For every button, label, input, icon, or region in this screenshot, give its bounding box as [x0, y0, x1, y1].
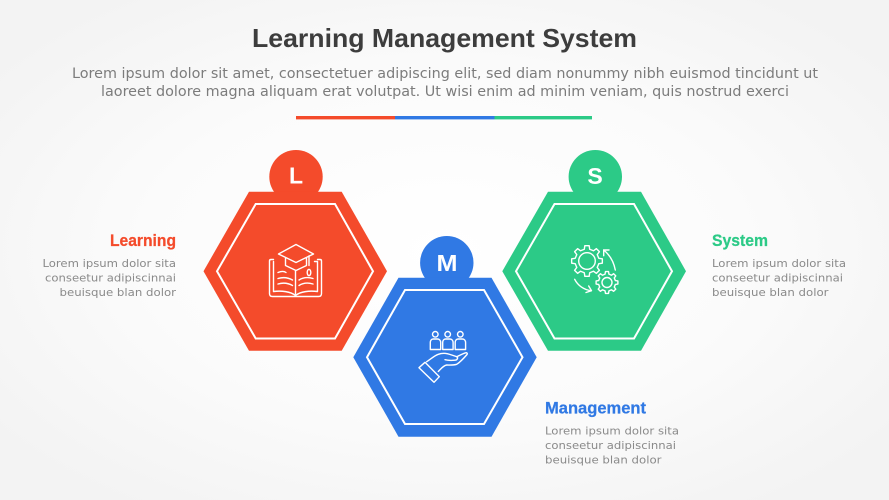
- description: management: conseetur adipiscinnai: [545, 439, 676, 452]
- description: learning: conseetur adipiscinnai: [45, 272, 176, 284]
- description: system: Lorem ipsum dolor sita: [712, 257, 846, 270]
- text block: learning: [42, 232, 177, 299]
- description: learning: beuisque blan dolor: [60, 286, 177, 299]
- panel: system hexagon: [502, 150, 686, 351]
- heading: learning: Learning: [110, 232, 176, 250]
- letter S: S: [587, 163, 603, 189]
- description: learning: Lorem ipsum dolor sita: [42, 257, 176, 270]
- description: system: conseetur adipiscinnai: [712, 272, 843, 284]
- icon: gears with arrows: [572, 246, 618, 293]
- subtitle text: [72, 66, 819, 100]
- description: system: beuisque blan dolor: [712, 286, 829, 299]
- heading: management: Management: [545, 400, 646, 418]
- icon: hand holding people: [419, 332, 467, 382]
- text block: management: [545, 400, 679, 466]
- description: management: Lorem ipsum dolor sita: [545, 424, 679, 438]
- description: learning: [42, 257, 177, 299]
- heading: system: System: [712, 232, 768, 250]
- title: Learning Management System: [252, 23, 637, 53]
- panel: learning hexagon: [204, 150, 387, 351]
- panel: management hexagon: [353, 236, 537, 437]
- letter M: M: [436, 250, 458, 276]
- subtitle text: Lorem ipsum dolor sit amet, consectetuer adipiscing elit, sed diam nonummy nibh euismod tincidunt ut: [72, 66, 819, 82]
- letter L: L: [289, 162, 303, 188]
- subtitle text: laoreet dolore magna aliquam erat volutpat. Ut wisi enim ad minim veniam, quis nostrud exerci: [101, 84, 789, 100]
- text block: system: [712, 232, 846, 299]
- tricolor divider: [296, 116, 592, 119]
- description: management: [545, 424, 679, 466]
- description: management: beuisque blan dolor: [545, 454, 662, 466]
- icon: book with graduation cap: [270, 244, 322, 296]
- description: system: [712, 257, 846, 299]
